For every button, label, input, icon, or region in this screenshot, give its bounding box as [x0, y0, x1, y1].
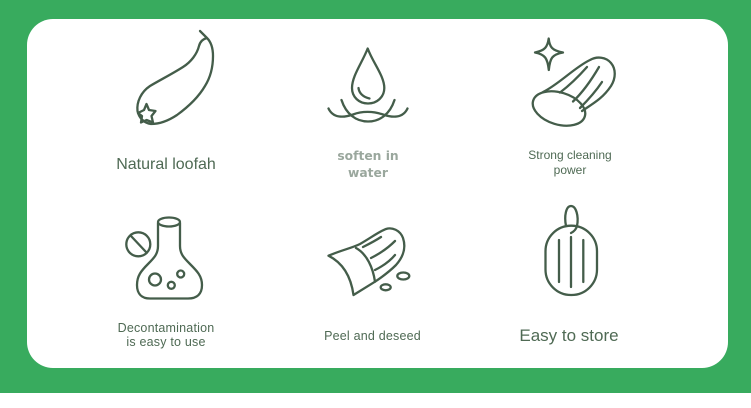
label: soften in water: soften in — [337, 149, 399, 163]
icon: loofah — [137, 31, 213, 124]
label: strong cleaning power: power — [554, 163, 586, 177]
white rounded panel — [27, 19, 728, 368]
label: easy to store: Easy to store — [519, 326, 619, 345]
icon: water drop — [328, 48, 408, 122]
label: strong cleaning power: Strong cleaning — [528, 148, 612, 162]
label: natural loofah: Natural loofah — [116, 156, 216, 173]
label: peel and deseed: Peel and deseed — [324, 329, 421, 343]
label: soften in water: water — [348, 166, 389, 180]
label: decontamination is easy to use: is easy to use — [126, 335, 206, 349]
icon: hanging loofah — [546, 206, 597, 295]
label: decontamination is easy to use — [118, 321, 214, 349]
icon: flask with prohibition sign — [126, 218, 202, 298]
label: strong cleaning power — [528, 148, 612, 177]
icon: peeled loofah and seeds — [328, 228, 409, 295]
icon: sparkle and cylinder sponge — [529, 38, 615, 132]
label: decontamination is easy to use: Decontamination — [118, 321, 214, 335]
label: soften in water — [337, 149, 399, 180]
